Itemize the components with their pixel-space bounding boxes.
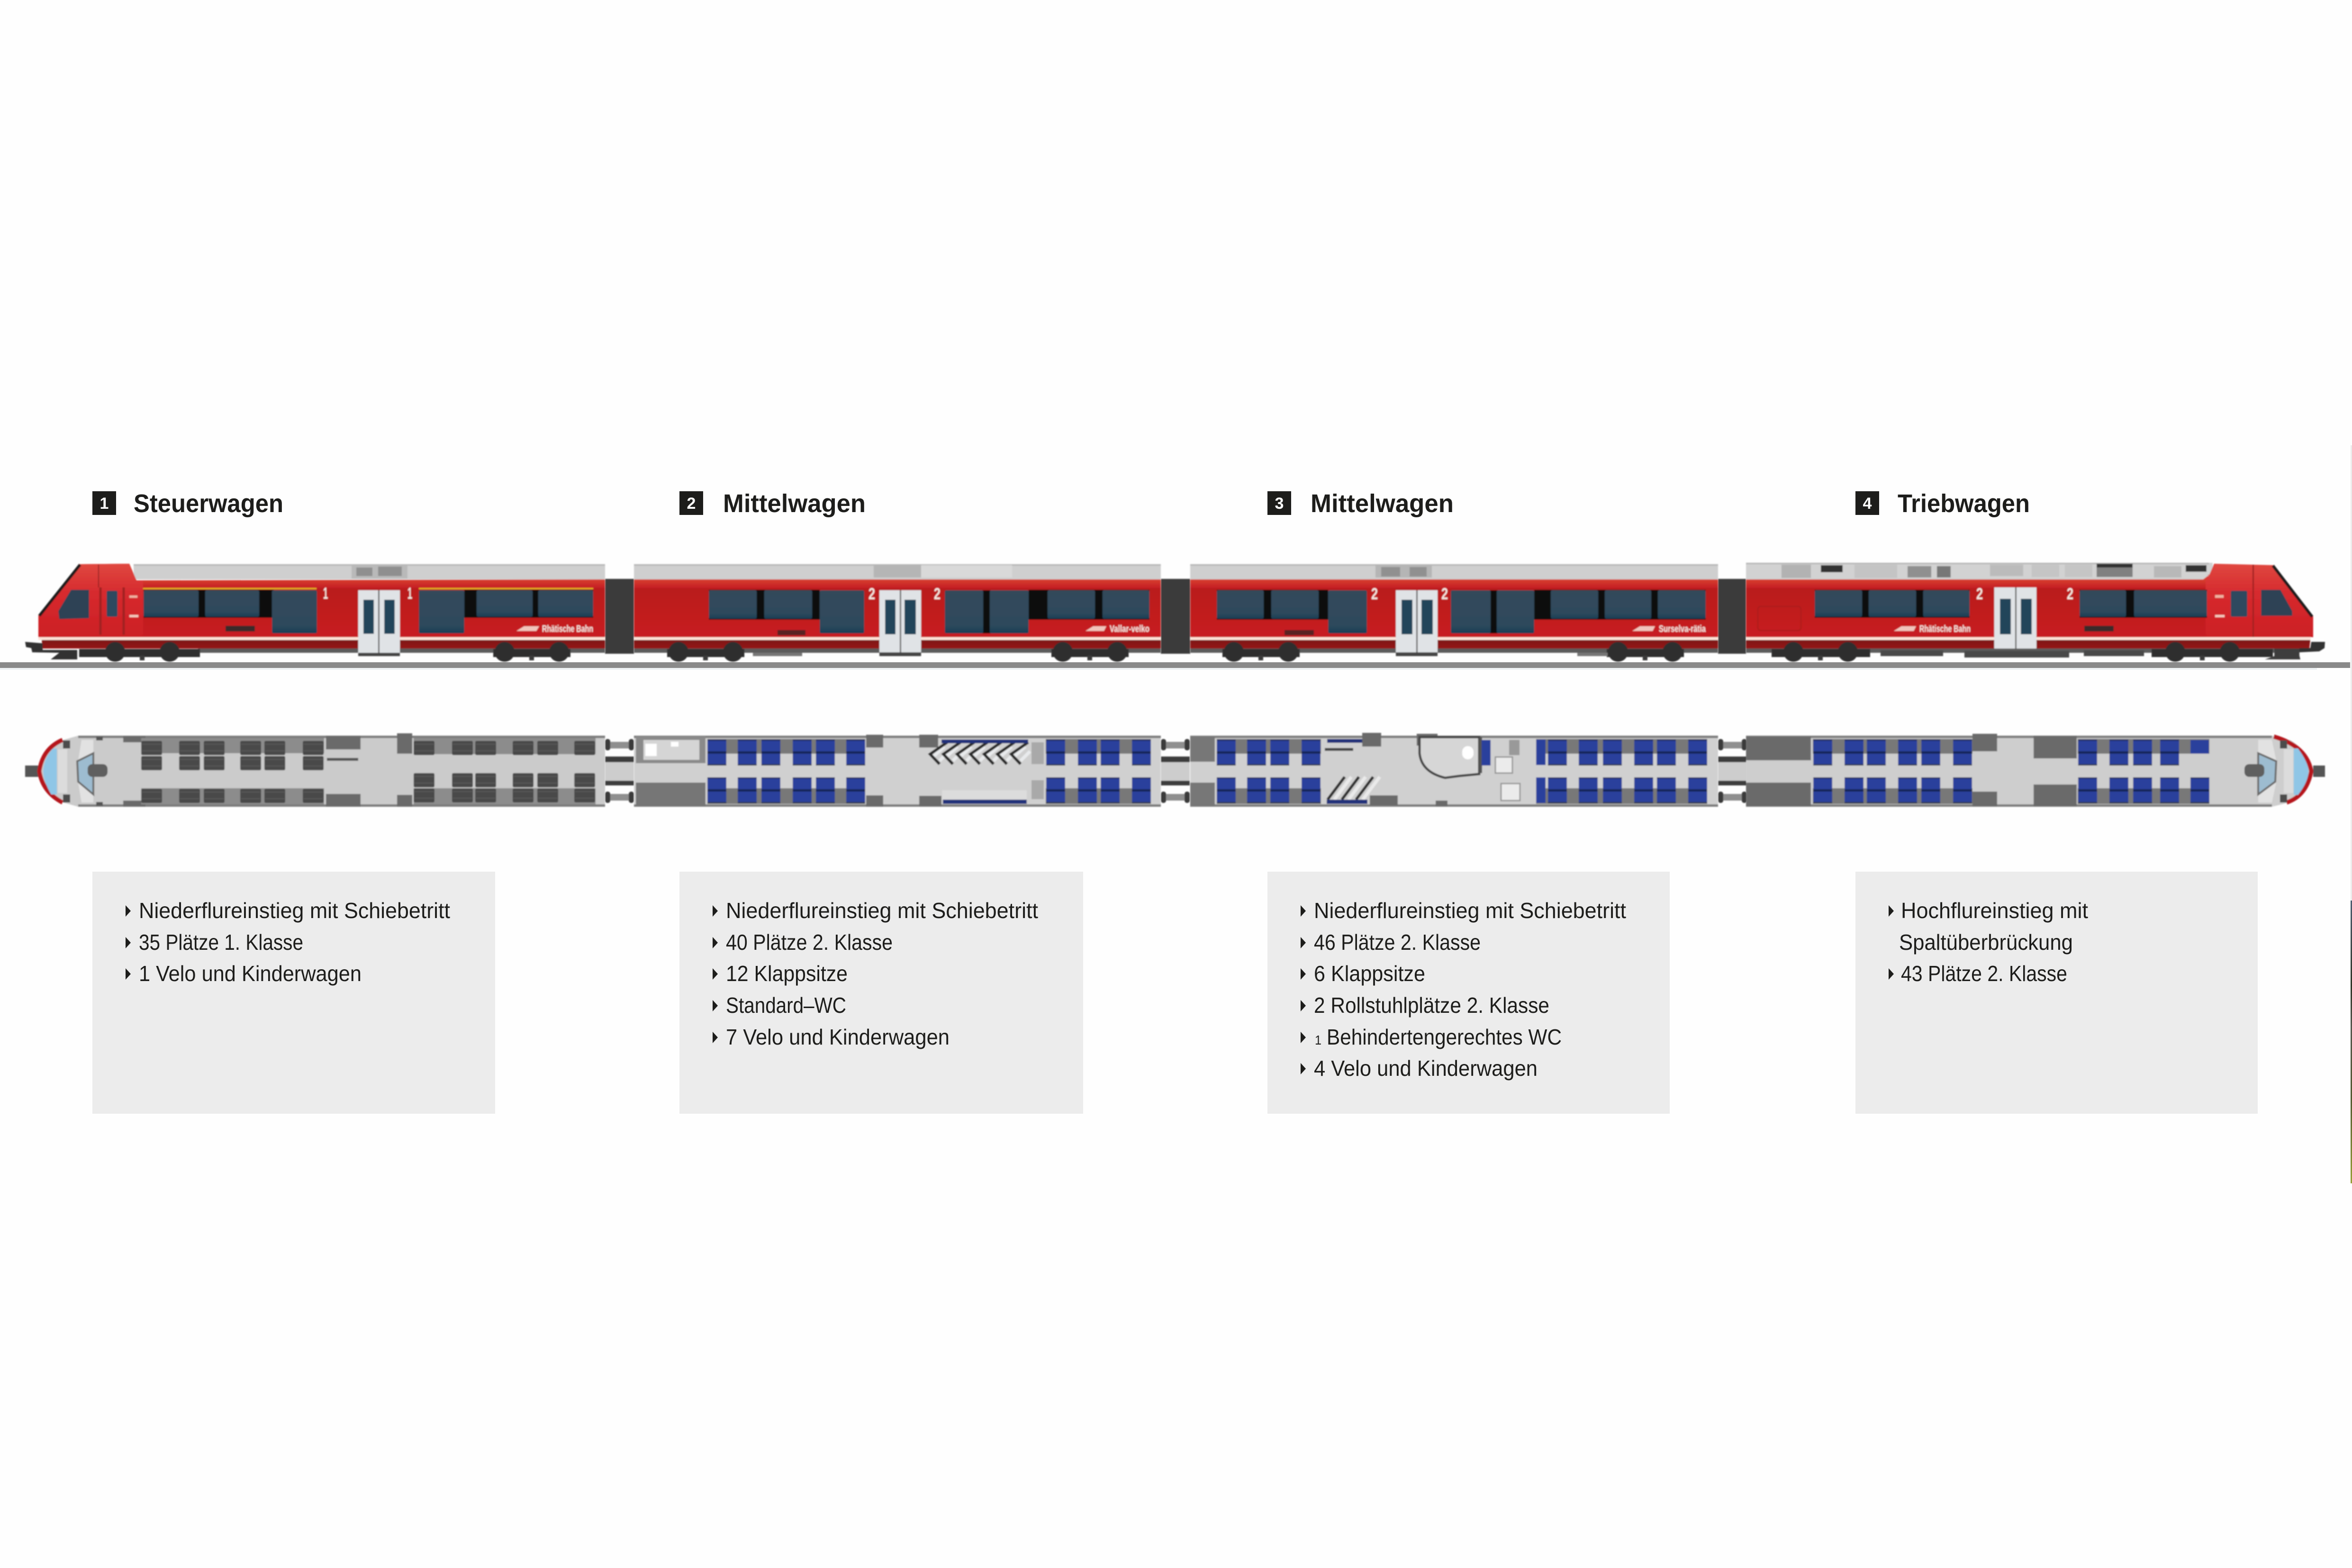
bullet list: Niederflureinstieg mit Schiebetritt	[139, 898, 450, 923]
bullet list: 12 Klappsitze	[726, 961, 848, 986]
roof	[1190, 564, 1718, 579]
bullet list: Spaltüberbrückung	[1899, 930, 2073, 955]
bullet list: 46 Plätze 2. Klasse	[1314, 930, 1481, 955]
door	[358, 590, 400, 656]
body	[38, 564, 605, 653]
logo	[1894, 624, 1971, 634]
seats front section	[707, 739, 865, 804]
side view: wagon 1 Steuerwagen	[25, 564, 605, 662]
accessible WC	[1420, 737, 1482, 778]
heading: wagon 2: Mittelwagen	[723, 489, 866, 518]
windows	[58, 590, 593, 633]
entrance blocks	[866, 735, 941, 807]
wheelchair spaces	[1482, 740, 1520, 801]
bogies	[1222, 642, 1684, 662]
panel: wagon 3 details	[1267, 872, 1670, 1114]
roof	[634, 564, 1161, 579]
class numerals: 1	[407, 585, 412, 603]
first class seats, front section	[141, 738, 324, 804]
logo: Rhätische Bahn	[542, 624, 593, 634]
seats front section	[1813, 739, 1972, 804]
class numerals: 2	[1371, 585, 1378, 603]
side view: wagon 2 Mittelwagen	[634, 564, 1161, 662]
bullet list: Hochflureinstieg mit	[1901, 898, 2088, 923]
seats front section	[1217, 739, 1321, 804]
floor and walls	[1190, 736, 1718, 807]
class numerals	[868, 585, 941, 603]
bullet list: 1	[1315, 1033, 1321, 1047]
heading: wagon 1: 1	[100, 495, 109, 513]
plan view: wagon 1	[25, 733, 605, 807]
bullet list	[713, 898, 1038, 1049]
class numerals: 2	[934, 585, 941, 603]
entrance blocks	[326, 733, 412, 807]
side view: wagon 4 Triebwagen	[1746, 563, 2325, 662]
bicycle racks and folding seats	[1325, 739, 1380, 804]
windows	[1815, 590, 2292, 631]
underframe, bogies, coupler	[1746, 642, 2325, 662]
right edge sliver	[2351, 445, 2352, 1183]
seats rear section	[2078, 739, 2209, 804]
bullet list	[126, 898, 450, 986]
bullet list: 2 Rollstuhlplätze 2. Klasse	[1314, 993, 1549, 1018]
bullet list	[1301, 898, 1626, 1081]
bullet list	[1889, 898, 2088, 986]
logo: Vallar-velko	[1110, 624, 1149, 634]
panel: wagon 1 details	[92, 872, 495, 1114]
body	[1190, 579, 1718, 653]
bogies and coupler	[25, 642, 570, 662]
floor and walls	[634, 736, 1161, 807]
floor and walls	[38, 736, 605, 807]
heading: wagon 3: Mittelwagen	[1311, 489, 1454, 518]
bullet list: Standard–WC	[726, 993, 846, 1018]
windows	[709, 590, 1149, 635]
rail	[0, 662, 2350, 670]
bogies	[667, 642, 1129, 662]
folding seats	[942, 790, 1027, 804]
bullet list: 43 Plätze 2. Klasse	[1901, 961, 2067, 986]
plan view: wagon 3	[1190, 733, 1718, 807]
floor and walls	[1746, 736, 2313, 807]
machine rooms	[1746, 734, 2077, 806]
heading: wagon 3: 3	[1275, 495, 1284, 513]
bullet list: 6 Klappsitze	[1314, 961, 1425, 986]
heading: wagon 1: Steuerwagen	[134, 489, 283, 518]
first class seats, rear section	[414, 738, 596, 804]
bullet list: 4 Velo und Kinderwagen	[1314, 1056, 1538, 1081]
class numerals: 2	[868, 585, 875, 603]
bullet list: Behindertengerechtes WC	[1327, 1025, 1562, 1049]
class numerals	[1371, 585, 1448, 603]
bicycle racks	[930, 739, 1030, 764]
windows	[1217, 590, 1706, 635]
logo: Surselva-rätia	[1659, 624, 1706, 634]
class numerals: 1	[323, 585, 328, 603]
side view: gangways between wagons	[605, 579, 1746, 654]
door	[1396, 590, 1438, 656]
bullet list: 1 Velo und Kinderwagen	[139, 961, 362, 986]
panel: wagon 2 details	[679, 872, 1083, 1114]
partition	[1031, 742, 1044, 799]
cab	[25, 736, 145, 807]
bullet list: Niederflureinstieg mit Schiebetritt	[1314, 898, 1626, 923]
body	[1746, 564, 2313, 649]
roof	[134, 564, 605, 579]
entrance blocks	[1362, 733, 1447, 806]
logo: Rhätische Bahn	[1919, 624, 1971, 634]
panel: wagon 4 details	[1855, 872, 2258, 1114]
logo	[1632, 624, 1706, 634]
class numerals: 2	[1441, 585, 1448, 603]
class numerals: 2	[2067, 585, 2073, 603]
heading: wagon 2: 2	[687, 495, 696, 513]
heading: wagon 4: 4	[1863, 495, 1872, 513]
plan view: wagon 4	[1746, 734, 2325, 807]
plan view: gangways	[605, 739, 1747, 803]
plan view: wagon 2	[634, 735, 1161, 807]
side view: wagon 3 Mittelwagen	[1190, 564, 1718, 662]
roof with equipment	[1746, 563, 2213, 579]
bullet list: 7 Velo und Kinderwagen	[726, 1025, 950, 1049]
class numerals: 2	[1976, 585, 1983, 603]
seats rear section	[1536, 739, 1707, 804]
cab	[2244, 737, 2325, 802]
door	[1994, 587, 2036, 651]
body	[634, 579, 1161, 653]
bullet list: 35 Plätze 1. Klasse	[139, 930, 303, 955]
bullet list: Niederflureinstieg mit Schiebetritt	[726, 898, 1038, 923]
class numerals	[1976, 585, 2073, 603]
door	[879, 590, 921, 656]
logo	[516, 624, 593, 634]
logo	[1086, 624, 1149, 634]
seats rear section	[1046, 739, 1151, 804]
heading: wagon 4: Triebwagen	[1898, 489, 2030, 518]
bullet list: 40 Plätze 2. Klasse	[726, 930, 893, 955]
WC and service room	[636, 737, 706, 806]
class numerals	[323, 585, 412, 603]
